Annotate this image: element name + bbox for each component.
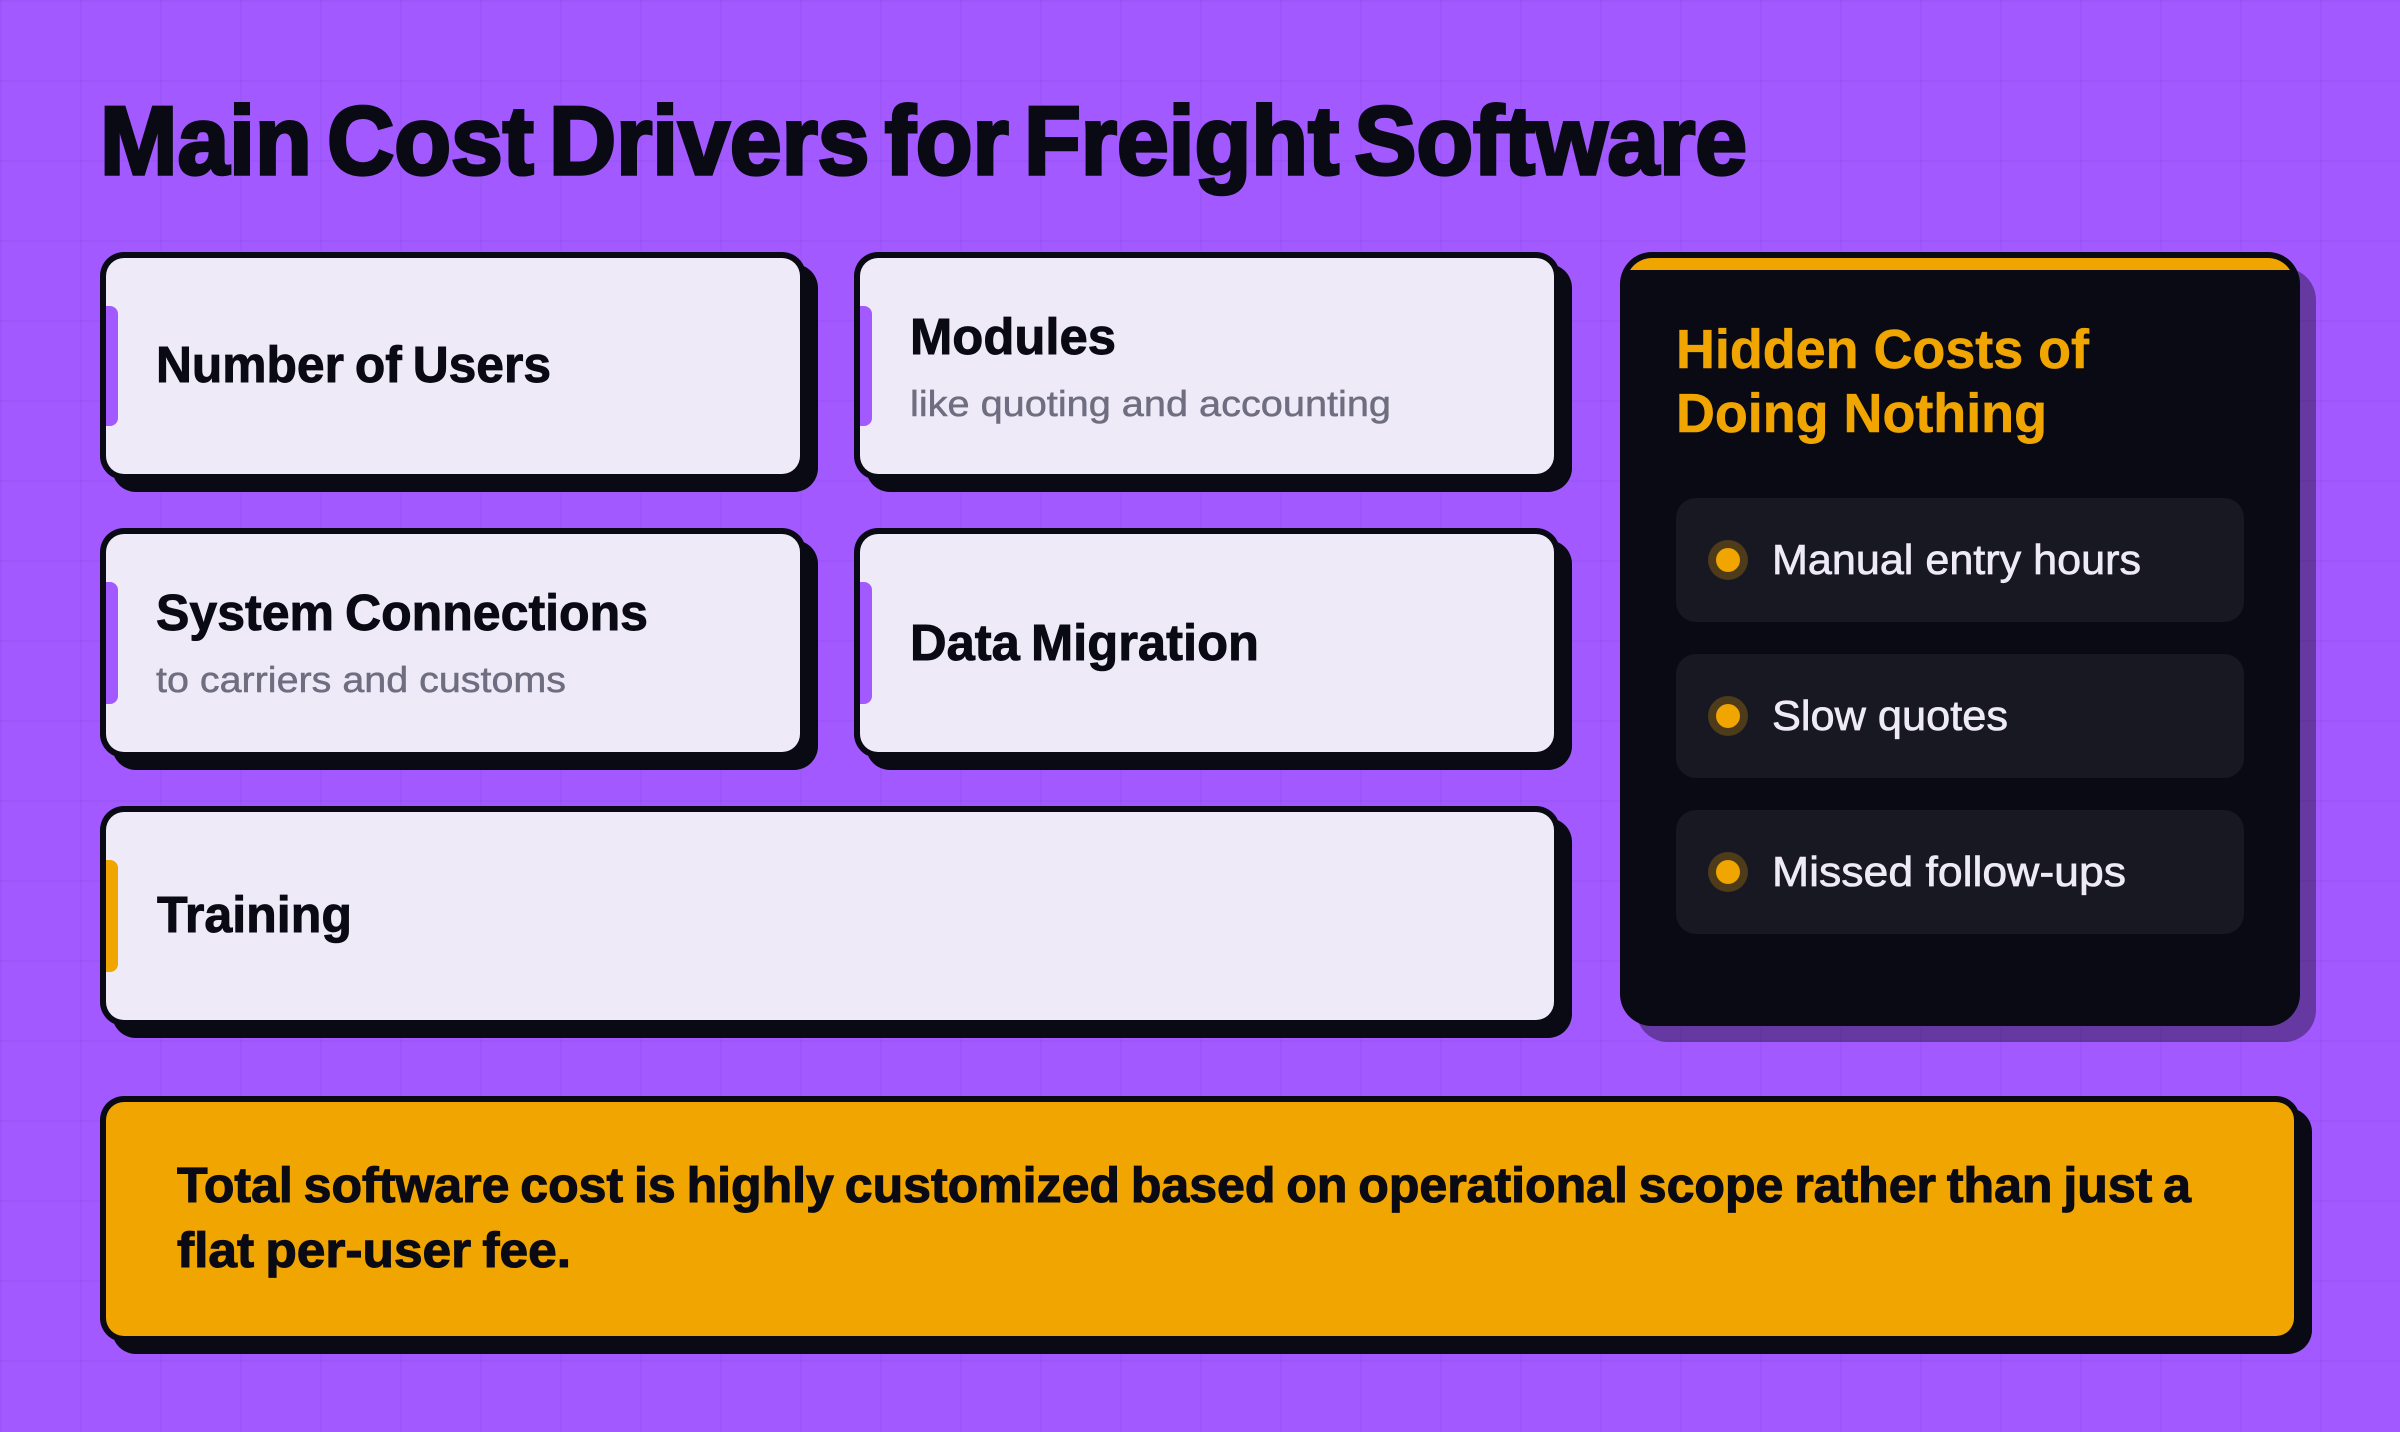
card title: Training	[157, 886, 352, 943]
callout text	[177, 1158, 2191, 1278]
item: Slow quotes: Slow quotes	[1772, 692, 2008, 739]
card subtitle: to carriers and customs	[156, 659, 566, 700]
accent bar	[106, 306, 118, 426]
card: System Connections	[100, 528, 818, 770]
accent bar	[106, 582, 118, 704]
callout banner	[100, 1096, 2312, 1354]
item: Manual entry hours	[1676, 498, 2244, 622]
card title: Number of Users	[156, 336, 551, 393]
card title: Modules	[910, 308, 1116, 365]
callout text: flat per-user fee.	[177, 1223, 571, 1278]
accent bar	[860, 306, 872, 426]
accent bar	[106, 860, 118, 972]
card: Data Migration	[854, 528, 1572, 770]
panel heading: Hidden Costs of	[1676, 318, 2090, 380]
item: Slow quotes	[1676, 654, 2244, 778]
card title: System Connections	[156, 584, 648, 641]
callout text: Total software cost is highly customized based on operational scope rather than just a	[177, 1158, 2191, 1213]
item: Manual entry hours: Manual entry hours	[1772, 536, 2141, 583]
card subtitle: like quoting and accounting	[910, 383, 1391, 424]
card: Modules	[854, 252, 1572, 492]
accent bar	[860, 582, 872, 704]
card title: Data Migration	[910, 614, 1259, 671]
item: Missed follow-ups: Missed follow-ups	[1772, 848, 2126, 895]
card: Training	[100, 806, 1572, 1038]
item: Missed follow-ups	[1676, 810, 2244, 934]
title: Main Cost Drivers for Freight Software	[100, 86, 1747, 195]
panel: hidden costs	[1620, 252, 2316, 1042]
panel heading: Doing Nothing	[1676, 382, 2047, 444]
panel heading	[1676, 318, 2090, 444]
card: Number of Users	[100, 252, 818, 492]
